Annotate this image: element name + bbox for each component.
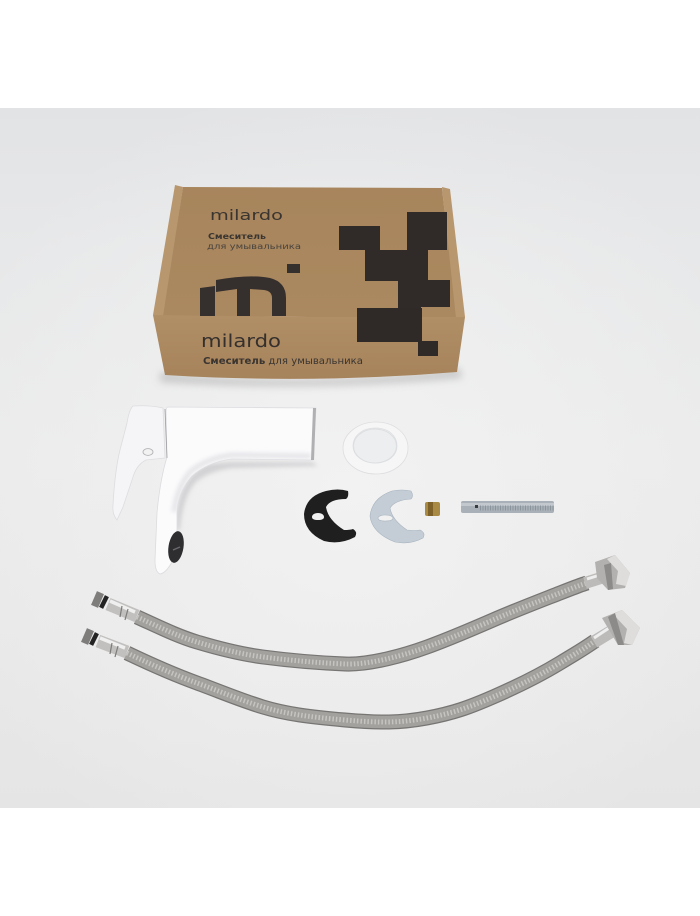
threaded rod [461, 501, 554, 513]
tube end [311, 408, 316, 460]
lid pixel pattern [339, 212, 450, 309]
lid logo wordmark: milardo [210, 208, 283, 224]
lever screw [143, 449, 153, 455]
right connector [594, 610, 640, 645]
photo background [0, 108, 700, 808]
cardboard box [153, 185, 465, 386]
front product name: Смеситель для умывальника [203, 356, 363, 367]
upper braided hose [94, 555, 630, 664]
lid product name: Смеситель [208, 232, 266, 241]
braid [127, 641, 595, 722]
tube underside shading [174, 455, 311, 512]
lid product name: для умывальника [207, 242, 301, 251]
front pixel pattern [357, 308, 438, 356]
lower braided hose [84, 610, 640, 722]
silver washer [370, 490, 424, 543]
white faucet [113, 406, 318, 574]
seam between lever and body [165, 409, 167, 458]
lid product name [207, 232, 301, 251]
left ferrule and tip [94, 598, 137, 620]
braid [137, 583, 587, 664]
box shadow [160, 368, 462, 386]
left ferrule and tip [84, 635, 127, 657]
right connector [585, 555, 630, 590]
lever handle [113, 406, 165, 520]
large m logo [200, 264, 300, 316]
faucet shadow [176, 462, 318, 530]
faucet body [155, 407, 316, 574]
box lid [163, 187, 456, 318]
box side flaps [153, 185, 465, 318]
box front [153, 315, 465, 379]
brass nut [425, 502, 440, 516]
front logo wordmark: milardo [201, 331, 281, 352]
white ring gasket [343, 422, 408, 474]
aerator [166, 530, 186, 564]
black washer [304, 490, 356, 542]
